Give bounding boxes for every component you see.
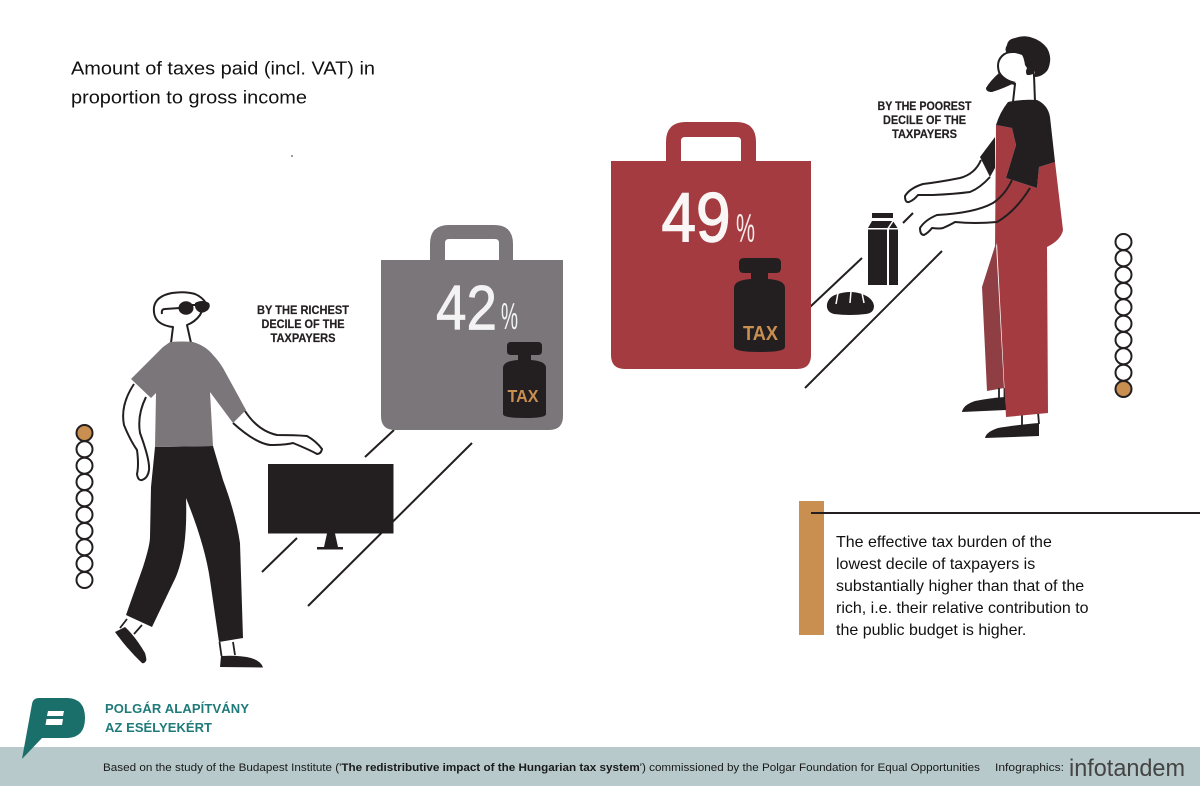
label: poorest decile: BY THE POOREST [878, 101, 972, 113]
label: poorest decile: TAXPAYERS [892, 129, 957, 141]
figure: poorest taxpayer [905, 36, 1063, 438]
label: richest decile [257, 305, 349, 345]
icon: tax weight grey bag [503, 342, 546, 418]
hair [1006, 36, 1050, 77]
figure: richest taxpayer [115, 292, 322, 668]
callout text: rich, i.e. their relative contribution to [836, 600, 1089, 617]
organisation name: POLGÁR ALAPÍTVÁNY [105, 701, 249, 716]
shoes [115, 627, 263, 668]
logo: Polgár Alapítvány [22, 698, 85, 759]
label: richest decile: TAXPAYERS [270, 333, 336, 345]
diagonal conveyor lines: rich [262, 430, 472, 606]
percentage 49: 49 [662, 178, 730, 256]
black shirt [996, 100, 1055, 188]
diagonal conveyor lines: poor [805, 213, 942, 388]
callout text: The effective tax burden of the [836, 534, 1052, 551]
trousers back leg [982, 243, 1004, 391]
icon: tax weight grey bag: TAX [508, 386, 539, 406]
icon: television [268, 464, 394, 550]
callout text: substantially higher than that of the [836, 578, 1084, 595]
decile dots: richest [76, 425, 92, 588]
ear [1026, 68, 1034, 75]
footer band [0, 747, 1200, 786]
trousers [126, 446, 243, 642]
callout [799, 501, 1200, 639]
sunglasses [162, 301, 210, 315]
t-shirt [131, 342, 246, 447]
icon: tax weight red bag [734, 258, 785, 352]
infographics credit: Infographics: [995, 762, 1064, 774]
callout text [836, 534, 1089, 639]
callout text: lowest decile of taxpayers is [836, 556, 1035, 573]
callout text: the public budget is higher. [836, 622, 1026, 639]
icon: tax weight red bag: TAX [743, 322, 778, 345]
right arm [233, 411, 322, 454]
logo: infotandem: infotandem [1069, 755, 1185, 782]
percentage 42: 42 [436, 274, 497, 344]
icon: red tax bag 49% [611, 122, 811, 369]
label: poorest decile: DECILE OF THE [883, 115, 966, 127]
organisation name: AZ ESÉLYEKÉRT [105, 720, 212, 735]
organisation name [105, 701, 249, 735]
left arm [123, 384, 149, 480]
label: poorest decile [878, 101, 972, 141]
beard [986, 72, 1016, 92]
source note: Based on the study of the Budapest Institute (' The redistributive impact of the Hungarian tax system ') commissioned by the Polgar Foundation for Equal Opportunities [103, 762, 981, 774]
icon: milk carton [868, 213, 898, 285]
ankles [120, 619, 235, 656]
icon: bread [827, 291, 874, 315]
head [154, 292, 206, 343]
title: proportion to gross income [71, 88, 307, 108]
back sleeve [980, 137, 995, 177]
label: richest decile: DECILE OF THE [262, 319, 345, 331]
overalls [995, 125, 1063, 417]
title: Amount of taxes paid (incl. VAT) in [71, 58, 375, 78]
decile dots: poorest [1116, 234, 1132, 397]
ankles [999, 388, 1039, 425]
title [71, 58, 375, 108]
label: richest decile: BY THE RICHEST [257, 305, 349, 317]
lower arm [920, 180, 1030, 235]
neck and face [998, 52, 1035, 102]
percent sign 42: % [501, 296, 518, 337]
percent sign 49: % [736, 207, 755, 251]
icon: grey tax bag 42% [381, 225, 563, 430]
upper arm [905, 160, 990, 202]
shoes [962, 397, 1039, 438]
